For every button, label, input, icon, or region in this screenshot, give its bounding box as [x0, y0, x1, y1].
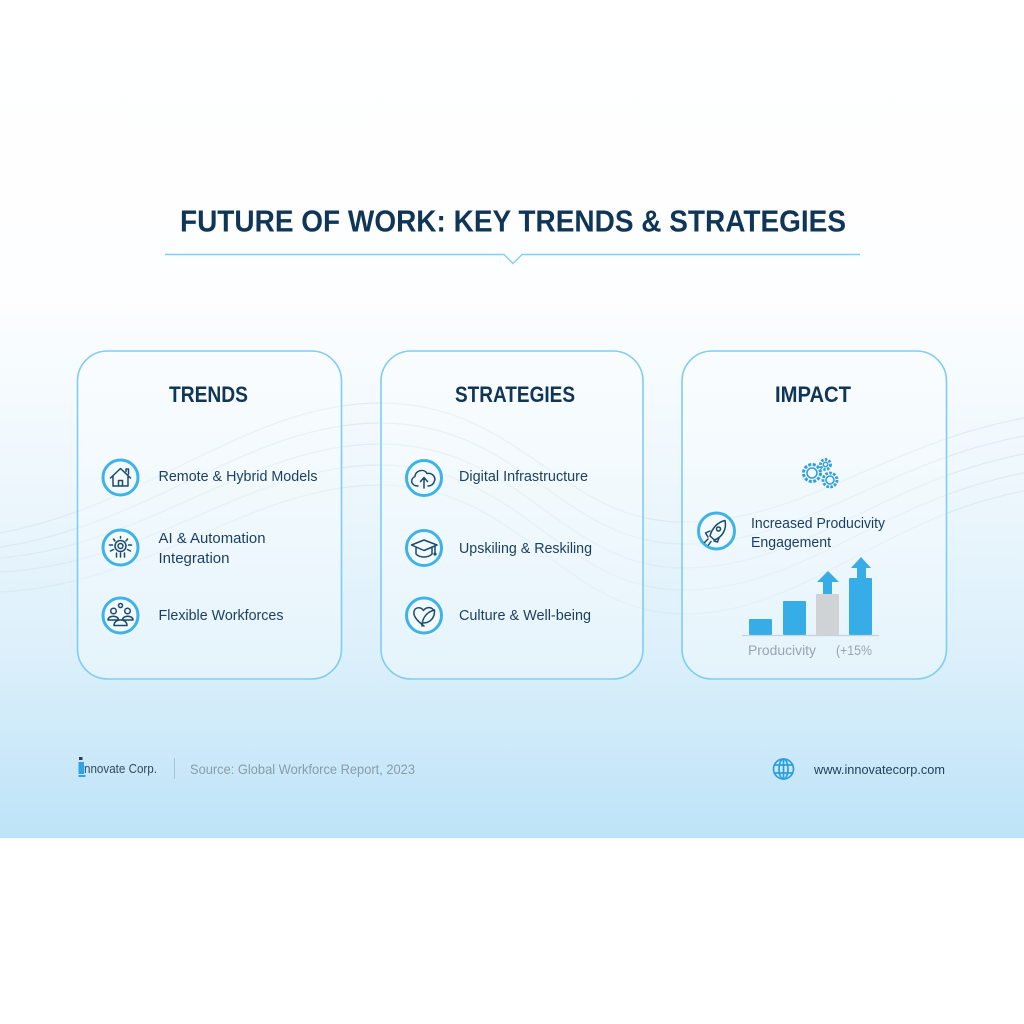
background waves	[0, 403, 1024, 614]
text: digital infrastructure: Digital Infrastructure	[459, 468, 588, 485]
panel: trends	[78, 351, 342, 679]
icon: graduation cap	[406, 530, 442, 566]
title: FUTURE OF WORK: KEY TRENDS & STRATEGIES	[180, 204, 846, 238]
icon: heart with leaf	[406, 598, 442, 633]
text: increased productivity engagement: Increased Producivity	[751, 515, 885, 532]
text: upskilling and reskilling: Upskiling & Reskiling	[459, 540, 592, 557]
icon: cloud upload	[406, 460, 442, 496]
icon: ai automation	[103, 530, 138, 565]
chart label: productivity: Producivity	[748, 642, 816, 658]
heading: strategies: STRATEGIES	[455, 382, 575, 407]
panel: impact	[682, 351, 946, 679]
text: flexible workforces: Flexible Workforces	[158, 607, 284, 624]
chart label: percent: (+15%	[836, 642, 872, 658]
icon: globe	[774, 759, 794, 779]
arrow: third bar	[817, 571, 839, 594]
text: ai and automation integration: Integration	[158, 550, 230, 567]
icon: team	[103, 598, 138, 633]
footer logo	[78, 757, 157, 777]
arrow: fourth bar	[851, 557, 871, 578]
heading: trends: TRENDS	[169, 382, 248, 407]
title underline with pointer	[165, 254, 860, 264]
website: www.innovatecorp.com	[813, 762, 945, 777]
text: remote and hybrid models: Remote & Hybrid Models	[158, 468, 318, 485]
panel: strategies	[381, 351, 643, 679]
source: Source: Global Workforce Report, 2023	[190, 761, 415, 777]
icon: gears	[804, 460, 837, 487]
bar chart	[742, 557, 879, 658]
text: culture and well-being: Culture & Well-being	[459, 607, 591, 624]
footer logo: nnovate Corp.	[84, 761, 157, 776]
text: increased productivity engagement	[751, 515, 885, 551]
footer divider	[174, 758, 176, 779]
text: ai and automation integration: AI & Automation	[158, 530, 266, 547]
heading: impact: IMPACT	[775, 382, 852, 407]
icon: rocket	[698, 513, 734, 549]
icon: house	[103, 460, 138, 495]
text: ai and automation integration	[158, 530, 266, 567]
text: increased productivity engagement: Engagement	[751, 534, 832, 551]
